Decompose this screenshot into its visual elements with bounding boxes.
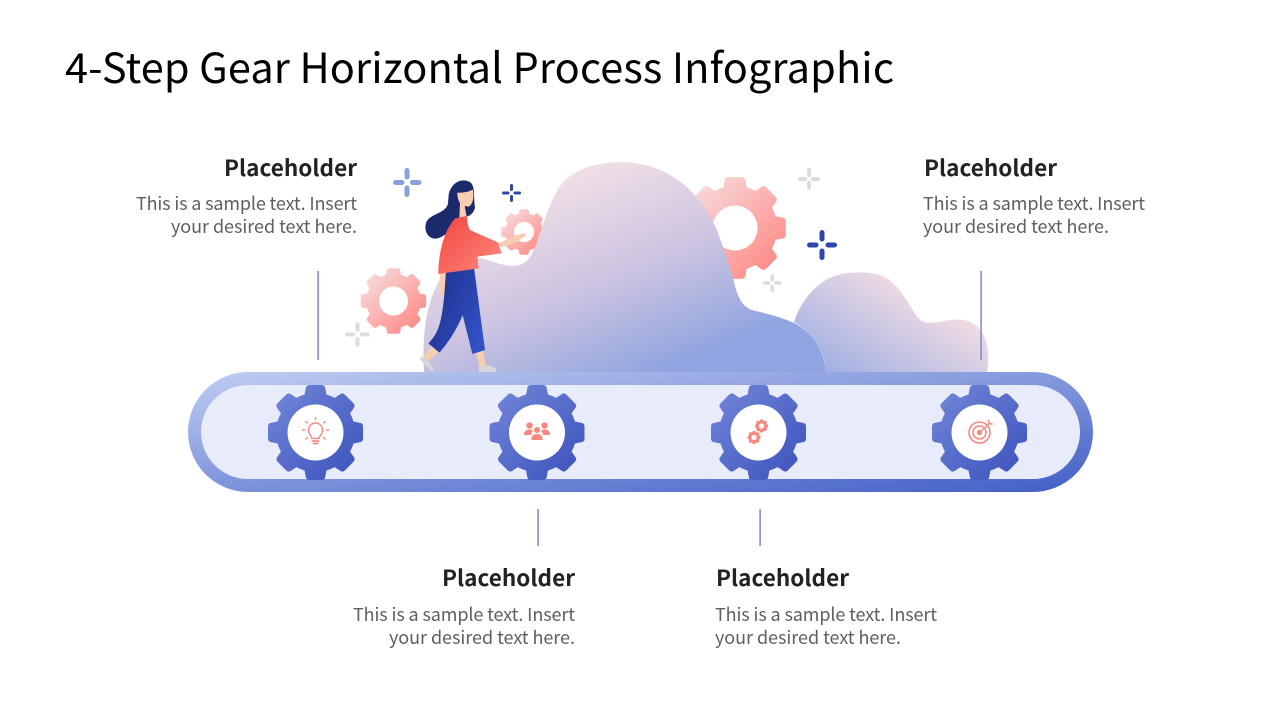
- sparkle: light blue: [393, 168, 422, 197]
- gear: pink left: [360, 268, 427, 334]
- text block: step 4: This is a sample text. Insert: [923, 190, 1145, 216]
- text block: step 2: your desired text here.: [389, 624, 575, 650]
- text block: step 1: Placeholder: [224, 151, 357, 183]
- icon: small gears: [747, 419, 768, 444]
- sparkle: grey left: [346, 322, 370, 346]
- sweater: [438, 216, 502, 274]
- conveyor pill: [194, 378, 1086, 486]
- connector line 1: [317, 271, 319, 360]
- text block: step 2: This is a sample text. Insert: [353, 601, 575, 627]
- gear step 3: [710, 384, 806, 480]
- text block: step 3: [715, 561, 937, 650]
- hair: [425, 180, 475, 239]
- text block: step 3: Placeholder: [716, 561, 849, 593]
- connector line 3: [759, 509, 761, 546]
- text block: step 2: Placeholder: [442, 561, 575, 593]
- cloud: small: [794, 272, 988, 372]
- sparkle: dark small: [502, 184, 521, 202]
- title: 4-Step Gear Horizontal Process Infographic: [65, 35, 894, 95]
- text block: step 2: [353, 561, 575, 650]
- gear: small pink near hand: [501, 209, 547, 255]
- text block: step 4: [923, 151, 1145, 239]
- gear step 4: [932, 384, 1028, 480]
- text block: step 3: This is a sample text. Insert: [715, 601, 937, 627]
- woman figure: [419, 180, 526, 372]
- text block: step 1: your desired text here.: [171, 213, 357, 239]
- sparkle: dark right: [807, 230, 837, 260]
- icon: people: [524, 422, 550, 440]
- sparkle: grey lower right: [763, 274, 782, 292]
- icon: light bulb: [302, 418, 328, 444]
- legs and shoes: [419, 346, 496, 372]
- icon: target: [969, 420, 992, 443]
- gear: large pink right: [696, 177, 786, 279]
- connector line 2: [537, 509, 539, 546]
- text block: step 1: This is a sample text. Insert: [136, 190, 357, 216]
- gear step 2: [489, 384, 585, 480]
- text block: step 1: [136, 151, 357, 239]
- gear step 1: [268, 384, 364, 480]
- cloud: large: [423, 162, 826, 372]
- trousers: [428, 268, 485, 354]
- arm skin: [439, 233, 526, 297]
- connector line 4: [980, 271, 982, 360]
- face and neck: [457, 189, 473, 218]
- text block: step 4: your desired text here.: [923, 213, 1109, 239]
- text block: step 3: your desired text here.: [715, 624, 901, 650]
- sparkle: grey top right: [798, 168, 820, 190]
- text block: step 4: Placeholder: [924, 151, 1057, 183]
